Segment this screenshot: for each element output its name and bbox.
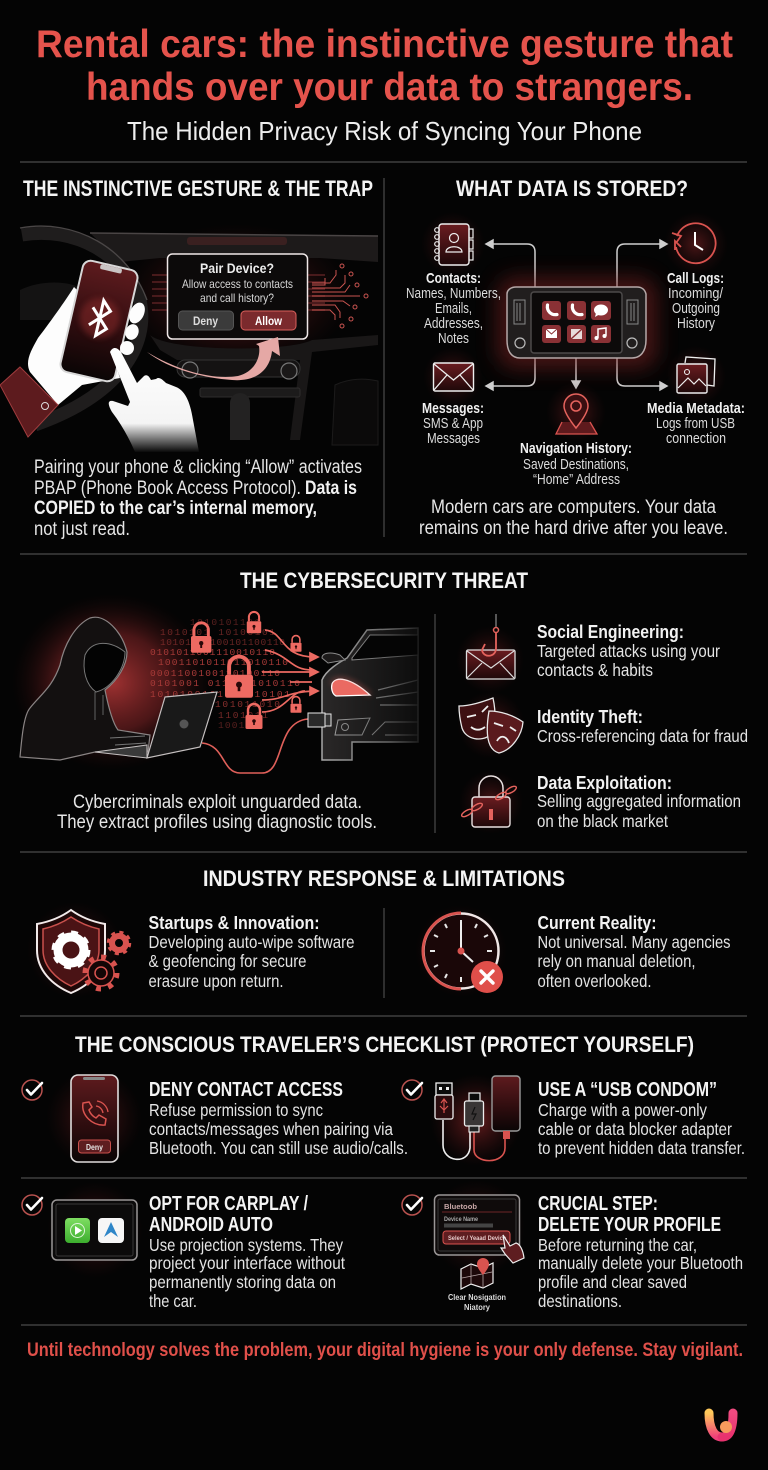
text: modern cars: Modern cars are computers. Your data [431, 497, 716, 518]
text: identity theft: Identity Theft: [537, 707, 643, 727]
dialog: pair device: Deny [193, 314, 218, 328]
icon: usb data blocker [430, 1074, 522, 1166]
text: current reality: rely on manual deletion, [538, 951, 696, 971]
icon: phone deny [46, 1070, 142, 1166]
text: social engineering: contacts & habits [537, 660, 653, 680]
text: pairing explanation: Pairing your phone & clicking “Allow” activates [34, 457, 362, 478]
text: current reality: Not universal. Many agencies [538, 932, 731, 952]
icon: shield with gears [27, 902, 130, 998]
chart: binary stream: 1010101 10100101 [160, 627, 275, 638]
arrow: data stream to car [262, 630, 318, 712]
heading: checklist: THE CONSCIOUS TRAVELER’S CHECKLIST (PROTECT YOURSELF) [75, 1032, 694, 1057]
text: carplay android auto: OPT FOR CARPLAY / [149, 1193, 308, 1215]
icon: carplay and android auto screen [47, 1182, 143, 1278]
icon: delete profile screen and map: Bluetoob [444, 1204, 477, 1211]
illustration: car dashboard with phone pairing [0, 224, 378, 452]
text: deny contact access: Refuse permission to sync [149, 1100, 323, 1120]
label: call logs: Incoming/ [668, 286, 724, 302]
icon: checkmark 2 [402, 1080, 422, 1100]
text: delete your profile: profile and clear saved [538, 1272, 687, 1292]
text: deny contact access: contacts/messages when pairing via [149, 1119, 393, 1139]
label: navigation history: “Home” Address [533, 472, 620, 488]
text: deny contact access [149, 1079, 408, 1158]
chart: binary stream: 0001100100110100110 [150, 668, 280, 679]
chart: binary stream: 1010101101 [190, 617, 260, 628]
title [36, 23, 733, 109]
text: modern cars [419, 497, 728, 539]
label: contacts: Contacts: [426, 270, 481, 287]
label: navigation history: Saved Destinations, [523, 457, 629, 473]
dialog: pair device: Allow [255, 314, 283, 328]
icon: theatre masks [457, 691, 525, 759]
text: carplay android auto: the car. [149, 1291, 197, 1311]
text: pairing explanation: not just read. [34, 519, 130, 540]
text: cybercriminals caption: They extract profiles using diagnostic tools. [57, 812, 377, 833]
panel: what data is stored [406, 176, 745, 539]
text: usb condom: USE A “USB CONDOM” [538, 1079, 717, 1101]
icon: navigation pin [546, 382, 606, 442]
label: call logs: History [677, 316, 716, 332]
icon: fingers [120, 300, 148, 355]
text: data exploitation: Selling aggregated information [537, 791, 741, 811]
label: call logs [667, 270, 724, 332]
icon: circuit traces [312, 264, 368, 328]
heading: industry response: INDUSTRY RESPONSE & LIMITATIONS [203, 866, 565, 891]
text: cybercriminals caption [57, 792, 377, 833]
icon: media metadata [666, 346, 726, 406]
label: media metadata: Logs from USB [656, 416, 735, 432]
icon: clock with cross [415, 905, 507, 997]
label: navigation history [520, 440, 632, 488]
icon: checkmark 3 [22, 1195, 42, 1215]
text: deny contact access: Bluetooth. You can still use audio/calls. [149, 1138, 408, 1158]
text: current reality: Current Reality: [538, 913, 656, 933]
heading: instinctive gesture: THE INSTINCTIVE GESTURE & THE TRAP [23, 176, 373, 201]
text: pairing explanation: Data is [305, 478, 357, 499]
arrow: tap allow [147, 337, 280, 380]
text: social engineering: Targeted attacks using your [537, 641, 720, 661]
title: hands over your data to strangers. [86, 66, 693, 109]
chart: binary stream: 1001101011011010110 [158, 657, 288, 668]
text: carplay android auto: Use projection systems. They [149, 1235, 343, 1255]
icon: phishing envelope [456, 614, 524, 694]
icon: phone deny: Deny [86, 1142, 103, 1152]
chart: binary stream: 101011010 [215, 699, 280, 710]
text: usb condom: Charge with a power-only [538, 1100, 707, 1120]
label: contacts: Addresses, [424, 316, 483, 332]
chart: binary stream [150, 617, 300, 731]
icon: delete profile screen and map: Select / Yeaad Device [448, 1235, 506, 1242]
label: contacts: Notes [438, 331, 469, 347]
text: current reality: often overlooked. [538, 971, 652, 991]
icon: delete profile screen and map [429, 1180, 525, 1312]
dialog: pair device: Allow access to contacts [182, 277, 293, 291]
label: messages [422, 400, 484, 447]
label: call logs: Outgoing [672, 301, 720, 317]
illustration: hacker extracting data from car [12, 594, 418, 773]
text: pairing explanation [34, 457, 362, 540]
text: startups and innovation [148, 913, 354, 991]
label: media metadata: connection [666, 431, 726, 447]
label: media metadata [647, 400, 745, 447]
text: cybercriminals caption: Cybercriminals exploit unguarded data. [73, 792, 362, 813]
icon: broken lock and chain [459, 770, 523, 834]
icon: logo [709, 1413, 733, 1437]
heading: cybersecurity threat: THE CYBERSECURITY THREAT [240, 568, 528, 593]
text: startups and innovation: Startups & Innovation: [148, 913, 320, 933]
chart: binary stream: 1010110 100101100110 [160, 637, 285, 648]
icon: checkmark 1 [22, 1080, 42, 1100]
text: startups and innovation: Developing auto-wipe software [148, 932, 354, 952]
text: deny contact access: DENY CONTACT ACCESS [149, 1079, 343, 1101]
chart: binary stream: 1010100101110110101 [150, 689, 290, 700]
text: startups and innovation: & geofencing for secure [148, 951, 306, 971]
icon: padlocks [191, 612, 302, 729]
title: Rental cars: the instinctive gesture that [36, 23, 733, 66]
text: carplay android auto: permanently storing data on [149, 1272, 336, 1292]
icon: contacts book [421, 212, 485, 276]
label: navigation history: Navigation History: [520, 440, 632, 457]
text: identity theft [537, 707, 748, 746]
label: contacts: Emails, [435, 301, 472, 317]
icon: checkmark 4 [402, 1195, 422, 1215]
text: delete your profile: Before returning the car, [538, 1235, 697, 1255]
text: data exploitation [537, 773, 741, 831]
text: delete your profile: destinations. [538, 1291, 622, 1311]
text: modern cars: remains on the hard drive after you leave. [419, 518, 728, 539]
panel: the instinctive gesture and the trap [0, 176, 378, 540]
dialog: pair device: Pair Device? [200, 260, 274, 276]
icon: delete profile screen and map: Niatory [464, 1302, 490, 1312]
icon: pointing hand [109, 348, 199, 452]
text: delete your profile [538, 1193, 743, 1311]
text: current reality [538, 913, 731, 991]
icon: call log clock [664, 212, 728, 276]
subtitle: The Hidden Privacy Risk of Syncing Your Phone [127, 116, 642, 146]
chart: binary stream: 100101 [218, 720, 258, 731]
text: startups and innovation: erasure upon return. [148, 971, 284, 991]
text: pairing explanation: PBAP (Phone Book Access Protocol). [34, 478, 301, 499]
label: contacts: Names, Numbers, [406, 286, 501, 302]
chart: binary stream: 0101001 0110101010110 [150, 678, 300, 689]
chart: binary stream: 0101011001110010110 [150, 647, 275, 658]
diagram: connector arrows [486, 240, 667, 390]
icon: car infotainment unit [497, 277, 657, 369]
icon: laptop [95, 692, 217, 758]
panel: industry response and limitations [27, 866, 731, 998]
label: messages: Messages [427, 431, 480, 447]
text: social engineering: Social Engineering: [537, 622, 684, 642]
icon: phone with bluetooth [59, 259, 139, 383]
panel: the cybersecurity threat [12, 568, 748, 834]
text: carplay android auto: project your interface without [149, 1253, 345, 1273]
icon: hooded hacker [20, 617, 150, 760]
heading: what data is stored: WHAT DATA IS STORED? [456, 176, 688, 201]
label: call logs: Call Logs: [667, 270, 724, 287]
dialog: pair device: and call history? [200, 291, 274, 305]
chart: binary stream: 1101011 [218, 710, 268, 721]
dialog: pair device [168, 254, 308, 339]
text: social engineering [537, 622, 720, 680]
text: pairing explanation: COPIED to the car’s internal memory, [34, 498, 317, 519]
text: usb condom [538, 1079, 745, 1158]
text: data exploitation: on the black market [537, 811, 668, 831]
icon: delete profile screen and map: Clear Nosigation [448, 1292, 506, 1302]
label: messages: Messages: [422, 400, 484, 417]
text: data exploitation: Data Exploitation: [537, 773, 672, 793]
icon: delete profile screen and map: Device Name [444, 1216, 478, 1223]
panel: conscious traveler's checklist [22, 1032, 745, 1312]
text: delete your profile: DELETE YOUR PROFILE [538, 1214, 721, 1236]
text: delete your profile: CRUCIAL STEP: [538, 1193, 658, 1215]
icon: envelope [423, 347, 483, 407]
icon: diagnostic cable [202, 713, 331, 773]
text: usb condom: cable or data blocker adapter [538, 1119, 732, 1139]
label: media metadata: Media Metadata: [647, 400, 745, 417]
icon: left hand holding phone [0, 287, 120, 437]
label: messages: SMS & App [423, 416, 483, 432]
icon: car front [322, 628, 418, 760]
text: carplay android auto: ANDROID AUTO [149, 1214, 273, 1236]
text: carplay android auto [149, 1193, 345, 1311]
label: contacts [406, 270, 501, 347]
